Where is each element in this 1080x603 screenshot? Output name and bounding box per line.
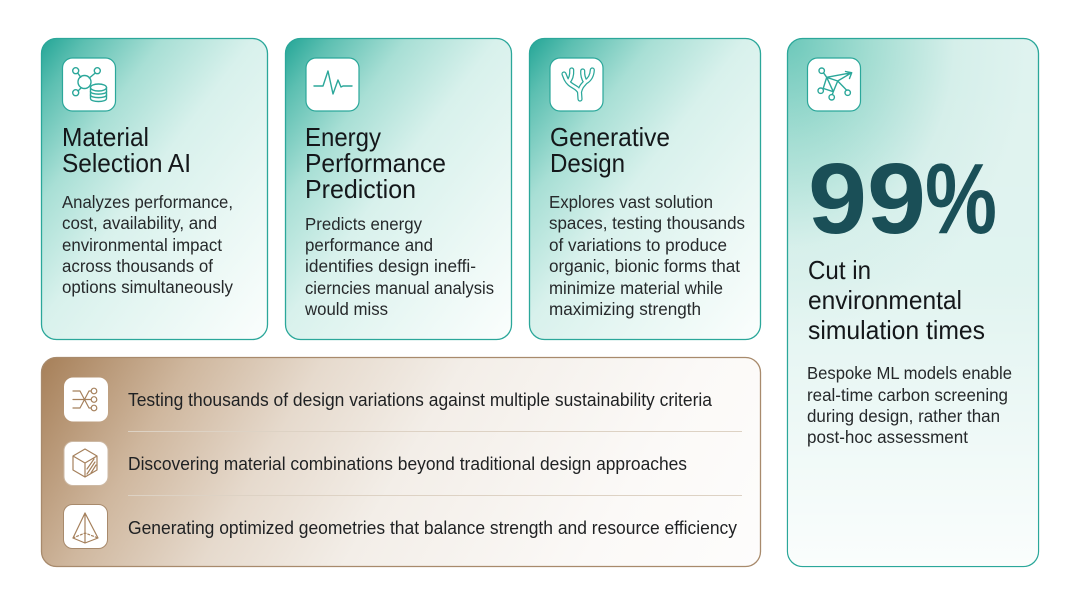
panel: Material Selection AI bbox=[42, 38, 268, 340]
text block: Explores vast solution bbox=[549, 192, 713, 212]
heading bbox=[305, 122, 446, 204]
text block: spaces, testing thousands bbox=[549, 213, 745, 233]
heading: Prediction bbox=[305, 174, 416, 204]
icon: network and database bbox=[62, 58, 116, 111]
icon: branching nodes bbox=[64, 378, 108, 422]
row: design variations bbox=[64, 378, 713, 422]
heading: Cut in bbox=[808, 255, 871, 285]
panel: Generative Design bbox=[530, 38, 760, 340]
row: optimized geometries bbox=[64, 504, 738, 548]
text block bbox=[62, 192, 233, 297]
text block: identifies design ineffi- bbox=[305, 256, 476, 276]
text block: maximizing strength bbox=[549, 299, 701, 319]
panel: 99% statistic bbox=[788, 38, 1038, 566]
icon: bionic branch bbox=[550, 58, 603, 111]
text block: performance and bbox=[305, 235, 433, 255]
heading bbox=[808, 255, 985, 345]
icon: pyramid bbox=[64, 504, 108, 548]
icon: network arrow bbox=[808, 58, 860, 111]
list text: Generating optimized geometries that balance strength and resource efficiency bbox=[128, 518, 738, 538]
panel: Energy Performance Prediction bbox=[286, 38, 512, 340]
text block: cost, availability, and bbox=[62, 213, 217, 233]
text block: minimize material while bbox=[549, 278, 723, 298]
text block: of variations to produce bbox=[549, 235, 727, 255]
statistic: 99% bbox=[808, 143, 997, 255]
heading: Performance bbox=[305, 148, 446, 178]
list text: Testing thousands of design variations against multiple sustainability criteria bbox=[128, 390, 713, 410]
text block bbox=[549, 192, 745, 319]
heading: Selection AI bbox=[62, 148, 191, 178]
text block: organic, bionic forms that bbox=[549, 256, 740, 276]
text block: Analyzes performance, bbox=[62, 192, 233, 212]
heading bbox=[62, 122, 191, 178]
heading: Generative bbox=[550, 122, 670, 152]
text block: during design, rather than bbox=[807, 406, 1000, 426]
heading: environmental bbox=[808, 285, 962, 315]
heading: simulation times bbox=[808, 315, 985, 345]
heading: Material bbox=[62, 122, 149, 152]
statistic: 99%: % bbox=[925, 143, 997, 255]
heading: Energy bbox=[305, 122, 381, 152]
heading: Design bbox=[550, 148, 625, 178]
text block: post-hoc assessment bbox=[807, 427, 968, 447]
statistic: 99%: 99 bbox=[808, 143, 926, 255]
text block: environmental impact bbox=[62, 235, 222, 255]
text block bbox=[807, 363, 1012, 447]
text block: would miss bbox=[304, 299, 388, 319]
text block: Bespoke ML models enable bbox=[807, 363, 1012, 383]
panel: capabilities list bbox=[42, 358, 760, 566]
row: material combinations bbox=[64, 442, 687, 486]
text block: cierncies manual analysis bbox=[305, 278, 494, 298]
icon: hatched cube bbox=[64, 442, 108, 486]
text block: options simultaneously bbox=[62, 277, 233, 297]
text block: across thousands of bbox=[62, 256, 213, 276]
text block: Predicts energy bbox=[305, 214, 422, 234]
list text: Discovering material combinations beyond traditional design approaches bbox=[128, 454, 687, 474]
icon: pulse bbox=[306, 58, 359, 111]
heading bbox=[550, 122, 670, 178]
text block bbox=[304, 214, 494, 319]
text block: real-time carbon screening bbox=[807, 385, 1008, 405]
